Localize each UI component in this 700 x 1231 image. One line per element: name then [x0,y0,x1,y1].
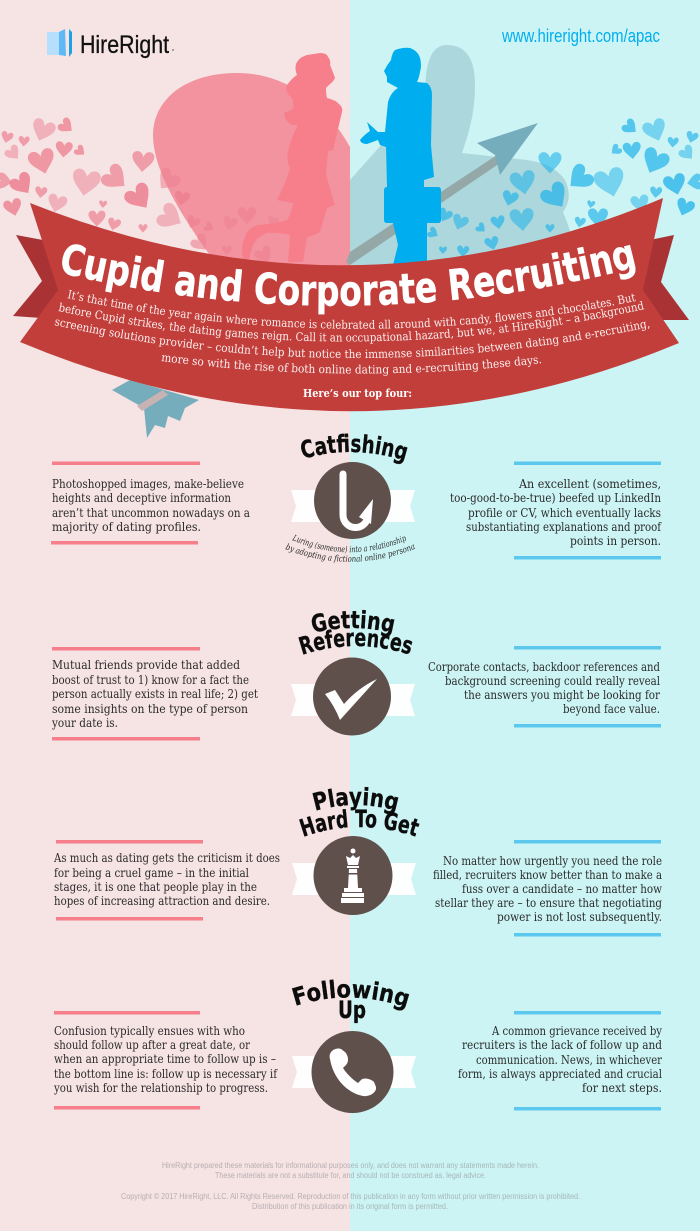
banner back tail right [625,235,689,320]
section: catfishing [51,434,662,563]
ribbon [292,863,416,895]
recruiting text: fuss over a candidate – no matter how [462,882,663,896]
icon: check mark [313,658,391,736]
icon: telephone [312,1031,394,1113]
dating text: Photoshopped images, make-believe [52,477,244,491]
banner [20,198,679,411]
banner intro text: before Cupid strikes, the dating games reign. Call it an occupational hazard, but we, at HireRight – a background [58,300,644,344]
dating text: boost of trust to 1) know for a fact the [52,673,249,687]
dating text: should follow up after a great date, or [54,1038,250,1052]
footer disclaimer [121,1161,580,1211]
recruiting text [458,1011,662,1110]
section: playing hard to get [53,786,663,936]
thumbs up shape behind man [350,45,572,290]
recruiting text: filled, recruiters know better than to make a [433,868,662,882]
woman silhouette [242,53,342,262]
hearts: right cluster [426,117,700,258]
dating text: person actually exists in real life; 2) get [52,687,258,701]
recruiting text: An excellent (sometimes, [518,477,661,491]
dating text: heights and deceptive information [52,491,231,505]
banner intro text [54,290,650,376]
recruiting text: beyond face value. [563,702,660,716]
heading: playing hard to get: Playing [312,786,398,814]
dating text: aren’t that uncommon nowadays on a [52,506,250,520]
dating text: Confusion typically ensues with who [54,1024,245,1038]
footer disclaimer: HireRight prepared these materials for informational purposes only, and does not warrant any statements made herein. [162,1161,539,1170]
recruiting text: for next steps. [582,1081,662,1095]
recruiting text: Corporate contacts, backdoor references and [428,660,660,674]
recruiting text [450,462,662,560]
icon: chess king [314,836,392,915]
dating text [53,1011,278,1110]
dating text: when an appropriate time to follow up is – [54,1052,276,1066]
dating text: stages, it is one that people play in the [54,880,257,894]
recruiting text: recruiters is the lack of follow up and [462,1038,662,1052]
dating text: you wish for the relationship to progress. [53,1081,268,1095]
heading: playing hard to get: Hard To Get [299,809,420,837]
dating text: for being a cruel game – in the initial [54,866,249,880]
dating text: the bottom line is: follow up is necessary if [54,1067,278,1081]
logo: HireRight [47,29,174,59]
banner intro text: It’s that time of the year again where romance is celebrated all around with candy, flowers and chocolates. But [68,290,636,329]
ribbon [291,490,415,522]
footer disclaimer: Copyright © 2017 HireRight, LLC. All Rights Reserved. Reproduction of this publication in any form without prior written permission is prohibited. [121,1192,580,1201]
section: getting references [51,610,661,740]
website url: www.hireright.com/apac [501,25,660,46]
banner intro text: more so with the rise of both online dating and e-recruiting these days. [161,355,541,376]
definition [285,534,415,563]
ribbon [292,1056,416,1088]
recruiting text: the answers you might be looking for [464,688,660,702]
dating text [51,462,250,544]
heading: catfishing: Catfishing [301,434,408,464]
heading: getting references: References [298,629,412,655]
background: dating side [0,0,350,1231]
recruiting text: points in person. [570,534,661,548]
heading: following up: Up [338,996,366,1024]
arrow head and shaft [346,123,538,265]
recruiting text: communication. News, in whichever [476,1053,662,1067]
heading: following up [292,980,410,1024]
arrow fletching [112,380,199,438]
recruiting text [428,646,661,728]
banner back tail left [13,235,70,320]
dating text: your date is. [51,716,118,730]
recruiting text: too-good-to-be-true) beefed up LinkedIn [450,491,661,505]
definition: by adopting a fictional online persona [285,543,415,563]
background: recruiting side [350,0,700,1231]
large heart shape behind woman [153,73,350,290]
heading: following up: Following [292,980,410,1010]
dating text: hopes of increasing attraction and desire. [54,894,270,908]
recruiting text: A common grievance received by [491,1024,662,1038]
footer disclaimer: These materials are not a substitute for, and should not be construed as, legal advice. [215,1171,486,1180]
top four line: Here’s our top four: [303,386,412,400]
recruiting text: No matter how urgently you need the role [443,854,662,868]
section: following up [53,980,662,1113]
footer disclaimer: Distribution of this publication in its original form is permitted. [252,1202,448,1211]
hearts: left cluster [0,116,280,267]
heading: getting references [298,610,412,655]
heading: playing hard to get [299,786,420,837]
recruiting text: substantiating explanations and proof [466,520,662,534]
man silhouette with briefcase [360,48,441,265]
icon: fish hook [314,462,391,539]
recruiting text: stellar they are – to ensure that negotiating [435,896,662,910]
recruiting text: profile or CV, which eventually lacks [468,506,661,520]
banner intro text: screening solutions provider – couldn’t help but notice the immense similarities between dating and e-recruiting, [54,320,650,358]
ribbon [291,684,415,716]
dating text [51,647,258,740]
banner title: Cupid and Corporate Recruiting [62,244,636,314]
logo: HireRight: HireRight [80,31,169,59]
dating text: Mutual friends provide that added [52,658,240,672]
definition: Luring (someone) into a relationship [292,534,406,554]
recruiting text: background screening could really reveal [445,674,660,688]
dating text: majority of dating profiles. [52,520,201,534]
recruiting text: power is not lost subsequently. [497,910,662,924]
dating text: some insights on the type of person [52,702,248,716]
heading: getting references: Getting [312,610,394,636]
dating text: As much as dating gets the criticism it does [53,851,280,865]
dating text [53,840,280,920]
recruiting text [433,840,663,936]
recruiting text: form, is always appreciated and crucial [458,1067,662,1081]
